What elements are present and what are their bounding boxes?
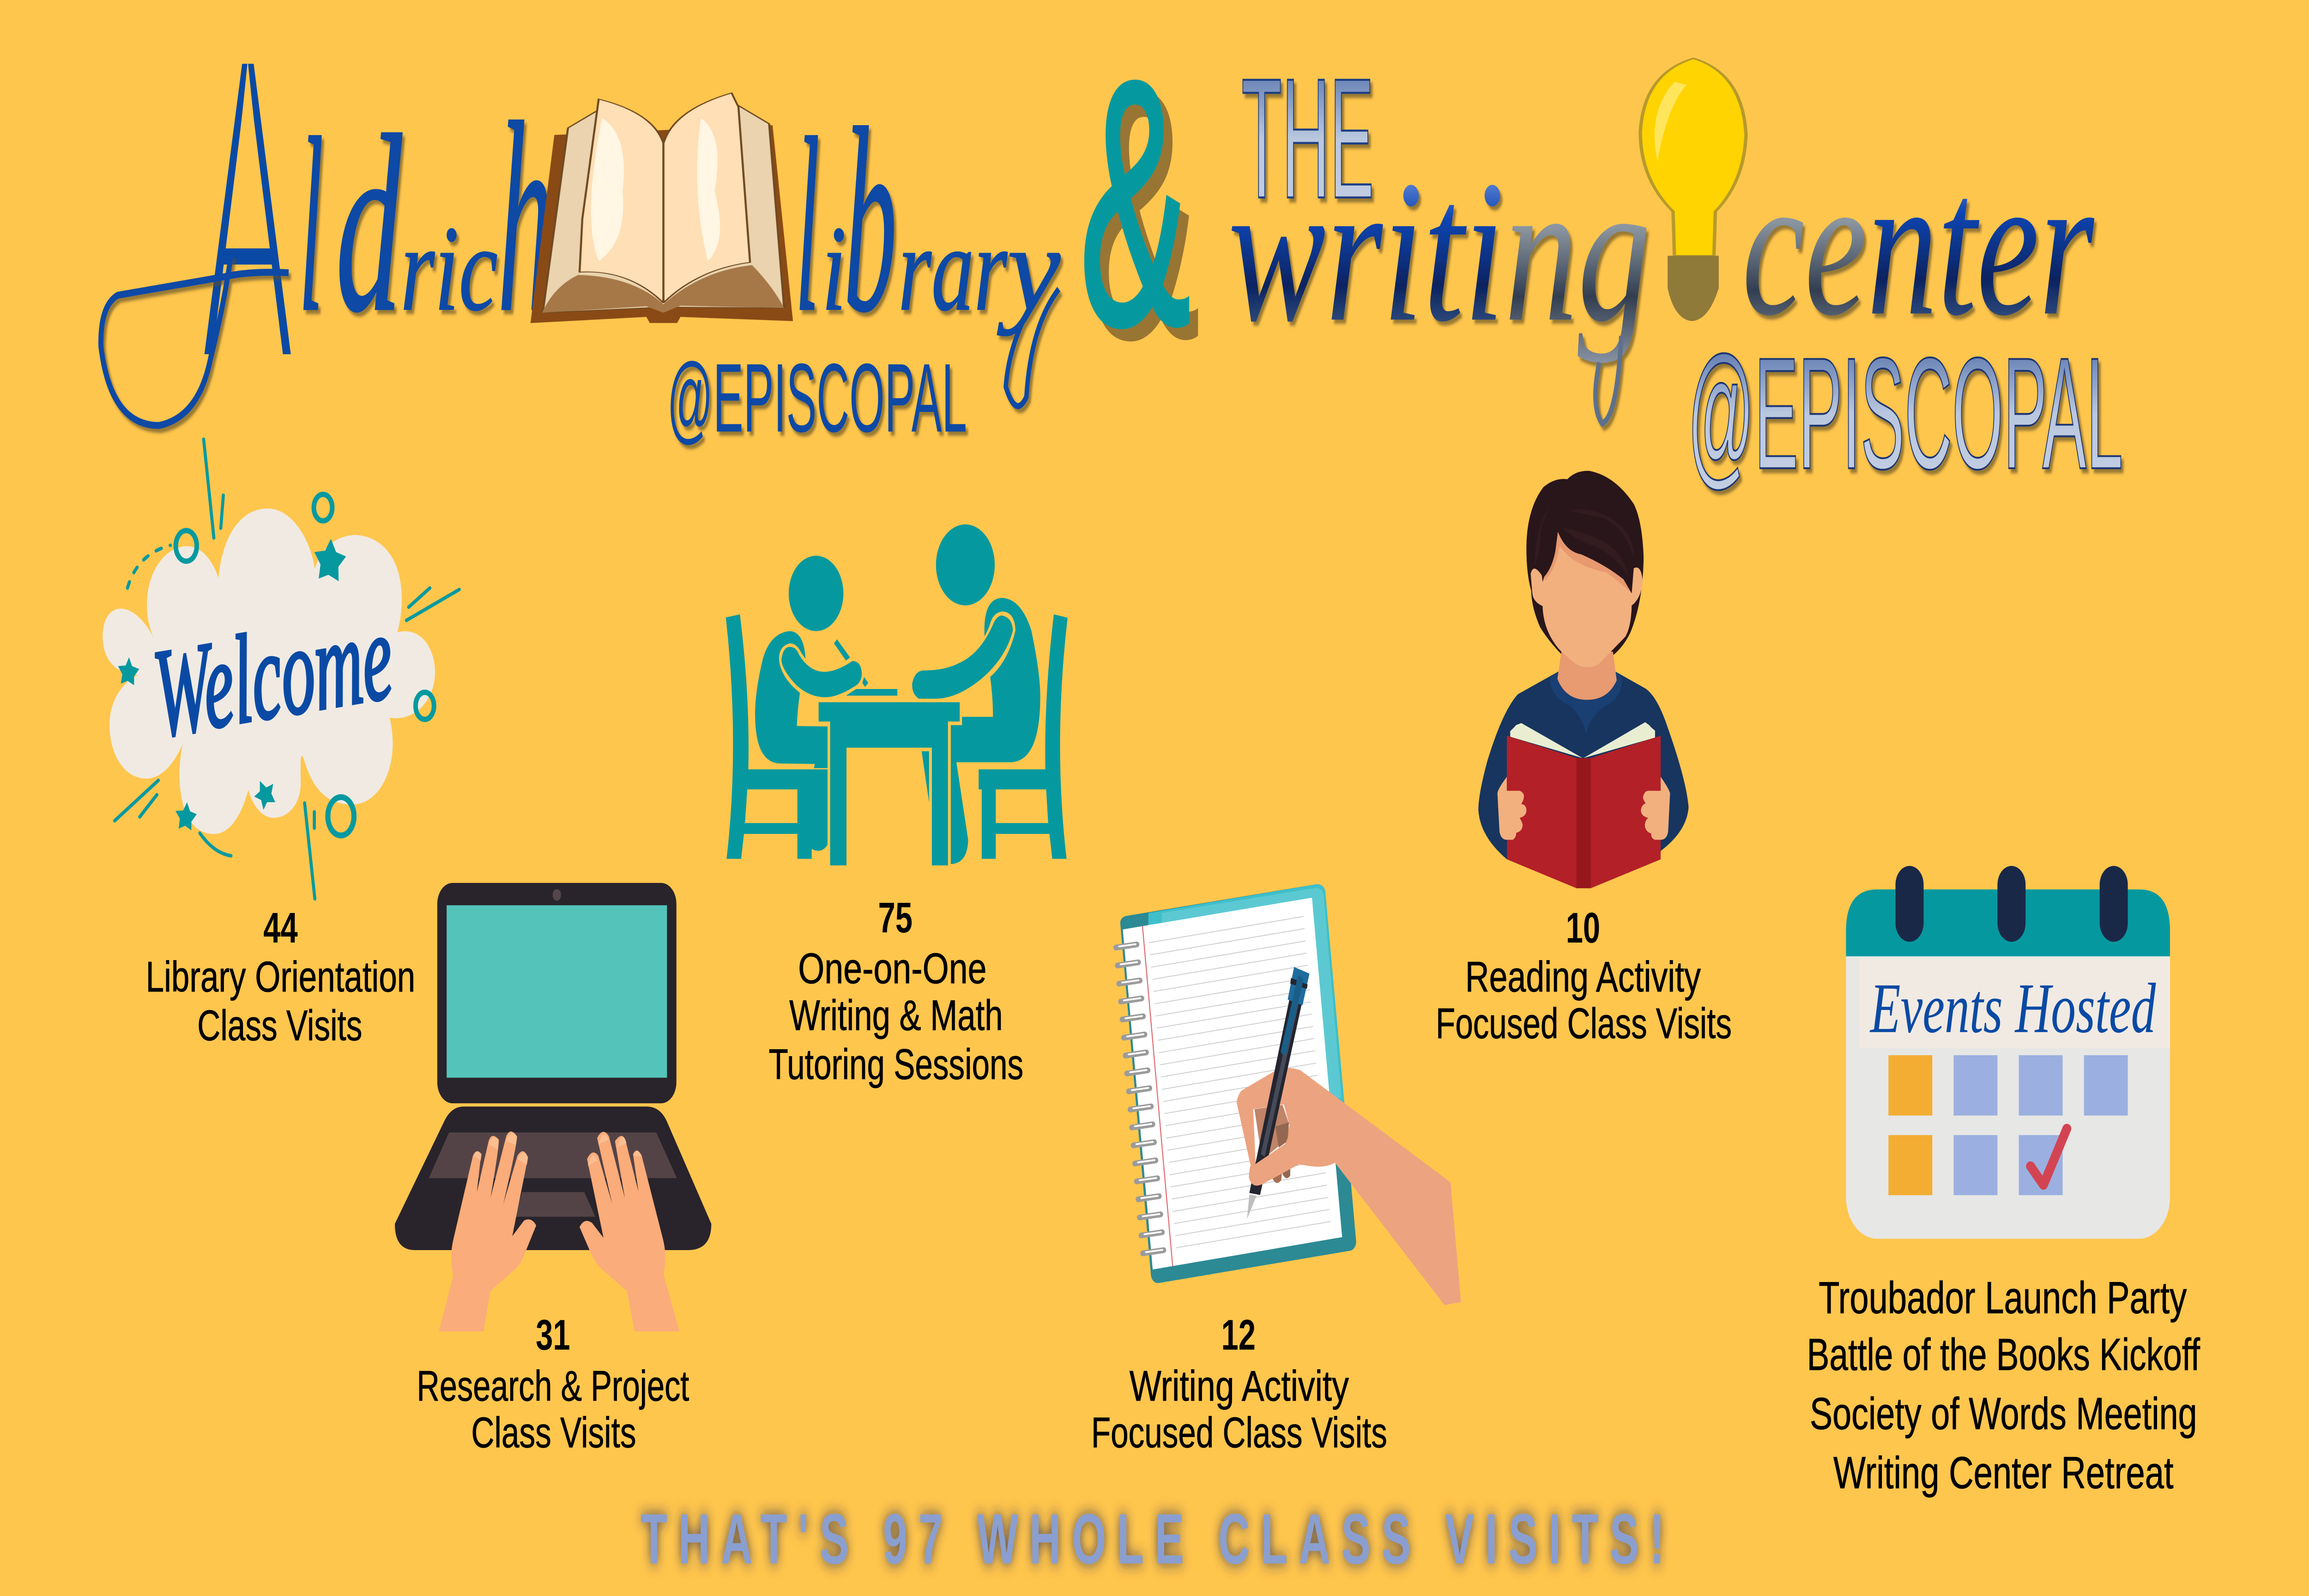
word Welcome: Welcome — [148, 585, 398, 764]
number 12: 12 — [1221, 1312, 1256, 1359]
letter l of library: l — [795, 86, 820, 363]
@EPISCOPAL writing center subheading: @EPISCOPAL — [1687, 325, 2123, 502]
letters ric: ric — [400, 200, 498, 336]
label: Library Orientation — [146, 953, 415, 1001]
ampersand shadow: & — [1088, 19, 1200, 410]
ampersand — [1079, 7, 1200, 410]
stat: reading activity — [1436, 904, 1732, 1048]
label line three: Tutoring Sessions — [769, 1041, 1023, 1088]
label line two: Class Visits — [197, 1002, 362, 1050]
word THE: THE — [1241, 43, 1374, 234]
icon: notebook and hand with pen — [1116, 884, 1461, 1305]
letter h: h — [498, 66, 553, 369]
stat: writing activity — [1091, 1312, 1387, 1457]
banner: total class visits: THAT'S 97 WHOLE CLASS VISITS! — [641, 1499, 1664, 1579]
event one: Troubador Launch Party — [1819, 1272, 2187, 1323]
icon: person reading red book — [1478, 471, 1689, 888]
heading: The Writing Center — [1228, 43, 2123, 502]
letter l: l — [299, 86, 323, 363]
cloud shape — [103, 508, 435, 834]
decorative swoosh of the A — [101, 254, 289, 425]
word center: center — [1742, 133, 2097, 358]
label: Writing Activity — [1130, 1362, 1349, 1410]
calendar body — [1846, 866, 2170, 1239]
icon: events calendar — [1846, 866, 2170, 1239]
@EPISCOPAL library subheading: @EPISCOPAL — [667, 343, 967, 452]
word writing: writing — [1228, 139, 1651, 364]
icon: open book — [531, 93, 793, 323]
ampersand fill: & — [1079, 7, 1191, 398]
heading: Aldrich Library — [101, 66, 1061, 452]
icon: light bulb — [1640, 58, 1746, 321]
illustration: welcome cloud — [103, 439, 459, 899]
letter y: y — [997, 200, 1061, 336]
stat: research and project — [417, 1312, 689, 1457]
list of events hosted — [1807, 1272, 2200, 1498]
label: Research & Project — [417, 1362, 689, 1410]
label line two: Class Visits — [471, 1409, 636, 1457]
icon: tutoring at a table — [726, 525, 1068, 865]
letter i: i — [822, 200, 846, 336]
calendar title: Events Hosted — [1869, 969, 2156, 1048]
letter d: d — [336, 84, 404, 365]
label line two: Focused Class Visits — [1091, 1409, 1387, 1457]
stars — [118, 539, 346, 830]
event three: Society of Words Meeting — [1810, 1388, 2197, 1439]
label line one: One-on-One — [798, 945, 986, 993]
letter b: b — [844, 74, 897, 367]
number 75: 75 — [878, 894, 913, 942]
number 10: 10 — [1566, 904, 1600, 952]
label: Reading Activity — [1465, 953, 1701, 1001]
stat: tutoring sessions — [769, 894, 1023, 1088]
decorative rays and circles — [115, 439, 459, 899]
event two: Battle of the Books Kickoff — [1807, 1329, 2200, 1379]
event four: Writing Center Retreat — [1833, 1447, 2174, 1498]
letters rar: rar — [898, 200, 1008, 336]
label line two: Focused Class Visits — [1436, 1000, 1732, 1048]
stat: library orientation — [146, 904, 415, 1050]
number 31: 31 — [536, 1312, 570, 1359]
decorative tail of y — [1006, 289, 1059, 406]
icon: laptop with hands — [395, 883, 711, 1331]
number 44: 44 — [263, 904, 298, 952]
label line two: Writing & Math — [789, 992, 1003, 1040]
decorative tail of g — [1596, 336, 1621, 423]
